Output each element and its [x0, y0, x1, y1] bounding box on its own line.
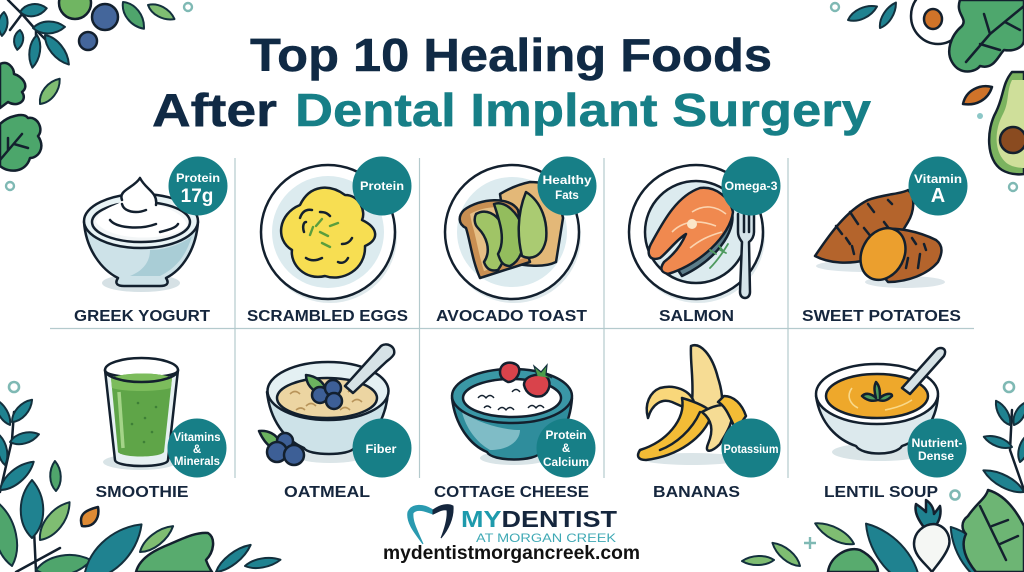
panel: Smoothie [96, 358, 226, 501]
panel: Oatmeal [259, 344, 412, 501]
badge: Fiber [352, 418, 412, 478]
illustration: avocado toast on plate [445, 165, 581, 303]
badge: Protein & Calcium: Calcium [543, 457, 589, 469]
panel: Cottage cheese [434, 363, 596, 501]
illustration: oatmeal bowl with blueberries [259, 344, 394, 465]
illustration: sweet potatoes [815, 190, 945, 288]
title: Top 10 Healing Foods [250, 29, 772, 81]
title [152, 29, 871, 136]
panel: Lentil soup [816, 348, 966, 501]
illustration: soup bowl [816, 348, 945, 461]
label: SWEET POTATOES [802, 308, 961, 325]
badge: Protein 17g [168, 156, 228, 216]
badge: Protein & Calcium [536, 418, 596, 478]
badge: Protein 17g: 17g [181, 186, 213, 207]
label: SMOOTHIE [96, 484, 189, 501]
panel: Scrambled eggs [247, 156, 412, 325]
badge: Vitamin A: Vitamin [914, 174, 962, 186]
panel: Greek yogurt [74, 156, 228, 325]
foliage: bottom left corner [0, 382, 281, 572]
badge: Protein & Calcium: Protein [546, 430, 586, 442]
badge: Nutrient-Dense: Dense [918, 451, 954, 463]
panel: Avocado toast [436, 156, 596, 325]
panel: Sweet potatoes [802, 156, 968, 325]
illustration: eggs on plate [261, 165, 397, 303]
tagline: AT MORGAN CREEK [476, 531, 616, 545]
panel: Bananas [638, 345, 780, 501]
badge: Potassium [722, 418, 780, 478]
badge: Potassium: Potassium [724, 444, 778, 456]
label: OATMEAL [284, 484, 370, 501]
badge: Vitamins & Minerals: Minerals [174, 456, 220, 468]
label: LENTIL SOUP [824, 484, 938, 501]
panel: Salmon [629, 156, 780, 325]
title: After [152, 84, 277, 136]
brand name: MY DENTIST [461, 506, 617, 532]
badge: Protein 17g: Protein [176, 173, 220, 185]
badge: Vitamin A [908, 156, 968, 216]
label: AVOCADO TOAST [436, 308, 587, 325]
label: SCRAMBLED EGGS [247, 308, 408, 325]
label: GREEK YOGURT [74, 308, 210, 325]
illustration: yogurt bowl [84, 178, 198, 292]
illustration: salmon on plate [629, 165, 765, 303]
badge: Omega-3: Omega-3 [724, 181, 778, 193]
badge: Nutrient-Dense: Nutrient- [912, 438, 963, 450]
foliage: top right corner [831, 0, 1024, 191]
label: COTTAGE CHEESE [434, 484, 589, 501]
badge: Protein: Protein [360, 181, 404, 193]
badge: Nutrient-Dense [908, 418, 966, 478]
website: mydentistmorgancreek.com [383, 543, 640, 564]
icon: tooth [408, 505, 453, 544]
foliage: top left corner [0, 0, 192, 190]
badge: Vitamins & Minerals [168, 418, 226, 478]
badge: Protein [352, 156, 412, 216]
badge: Fiber: Fiber [366, 444, 397, 456]
illustration: peeled banana [638, 345, 746, 465]
label: SALMON [659, 308, 734, 325]
badge: Healthy Fats: Healthy [542, 175, 592, 187]
illustration: cottage cheese bowl with strawberries [452, 363, 572, 465]
foliage: bottom right corner [742, 382, 1024, 572]
badge: Vitamins & Minerals: & [193, 444, 201, 456]
badge: Healthy Fats: Fats [555, 190, 579, 202]
badge: Healthy Fats [538, 156, 596, 216]
badge: Vitamins & Minerals: Vitamins [174, 432, 220, 444]
badge: Vitamin A: A [931, 185, 945, 207]
title: Dental Implant Surgery [295, 84, 871, 136]
illustration: green smoothie glass [103, 358, 178, 470]
badge: Omega-3 [722, 156, 780, 216]
logo: My Dentist at Morgan Creek [383, 505, 640, 564]
badge: Protein & Calcium: & [562, 443, 570, 455]
label: BANANAS [653, 484, 740, 501]
